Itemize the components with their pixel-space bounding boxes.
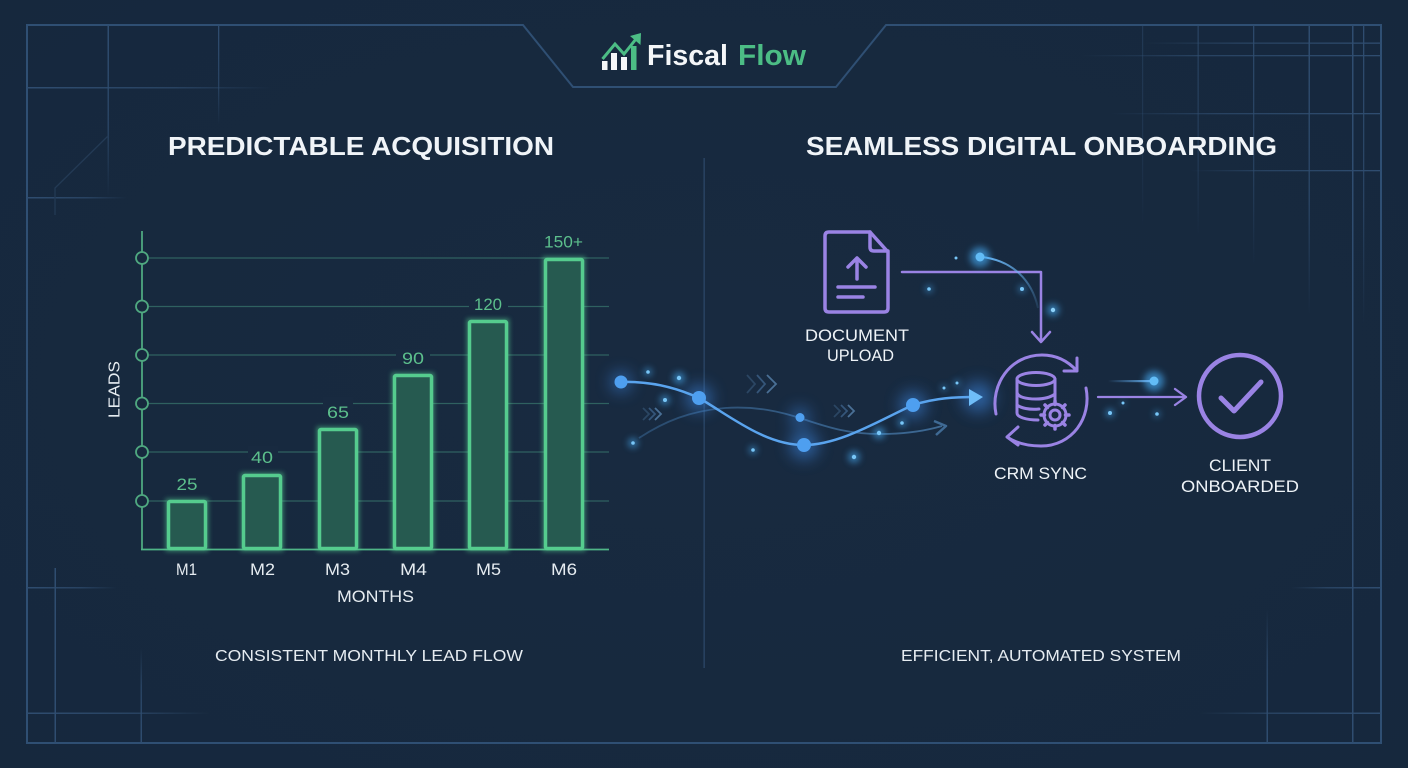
month labels: M2 — [250, 560, 275, 579]
sync arrows — [995, 355, 1077, 414]
main flow line — [621, 382, 975, 445]
client onboarded step — [1181, 355, 1299, 496]
y axis — [136, 231, 148, 549]
value labels: 90 — [402, 349, 424, 368]
sparks — [628, 368, 960, 463]
gridlines — [148, 258, 609, 501]
flow arrowhead — [969, 389, 983, 406]
gear — [1044, 404, 1066, 426]
value labels: 25 — [176, 475, 198, 494]
label: CRM SYNC — [994, 464, 1087, 483]
month labels: M6 — [551, 560, 577, 579]
document upload step — [805, 232, 909, 365]
heading: right: SEAMLESS DIGITAL ONBOARDING — [806, 131, 1277, 161]
icon: CRM sync — [995, 355, 1087, 446]
month labels: M4 — [400, 560, 427, 579]
logo — [602, 33, 807, 72]
x axis title: MONTHS — [337, 588, 414, 606]
label: DOCUMENT — [805, 326, 909, 345]
blue arc — [981, 257, 1038, 308]
arc sparks — [926, 247, 1059, 316]
CRM sync step — [994, 355, 1087, 483]
flow glows — [611, 372, 993, 459]
month labels: M3 — [325, 560, 350, 579]
month labels — [176, 560, 577, 579]
wordmark: Flow — [738, 40, 807, 72]
month labels: M1 — [176, 560, 197, 579]
label gaps — [248, 300, 508, 458]
arrow sparks — [1106, 371, 1164, 417]
x axis — [141, 548, 609, 550]
arrow: upload to CRM — [902, 257, 1050, 342]
label: CLIENT — [1209, 456, 1271, 475]
caption: left: CONSISTENT MONTHLY LEAD FLOW — [215, 648, 524, 665]
database — [1017, 372, 1055, 386]
arrow: CRM to client — [1098, 389, 1186, 405]
label line 2: ONBOARDED — [1181, 477, 1299, 496]
value labels: 150+ — [544, 232, 583, 252]
flow connector — [611, 368, 993, 463]
icon: rising chart — [602, 33, 641, 70]
value labels: 120 — [474, 295, 502, 314]
bar glow — [168, 260, 582, 548]
label line 2: UPLOAD — [827, 346, 894, 365]
y axis title: LEADS — [106, 361, 124, 418]
icon: document upload — [825, 232, 888, 312]
icon: check circle — [1199, 355, 1281, 437]
chevrons — [643, 375, 854, 420]
bar chart — [106, 231, 609, 606]
caption: right: EFFICIENT, AUTOMATED SYSTEM — [901, 648, 1181, 665]
value labels: 40 — [251, 448, 273, 467]
wordmark: Fiscal — [647, 40, 728, 72]
month labels: M5 — [476, 560, 501, 579]
panel divider — [704, 158, 705, 668]
bars — [168, 260, 582, 548]
flow nodes — [614, 376, 920, 452]
value labels — [176, 232, 583, 494]
value labels: 65 — [327, 403, 349, 422]
heading: left: PREDICTABLE ACQUISITION — [168, 131, 554, 161]
secondary flow line — [639, 408, 946, 438]
